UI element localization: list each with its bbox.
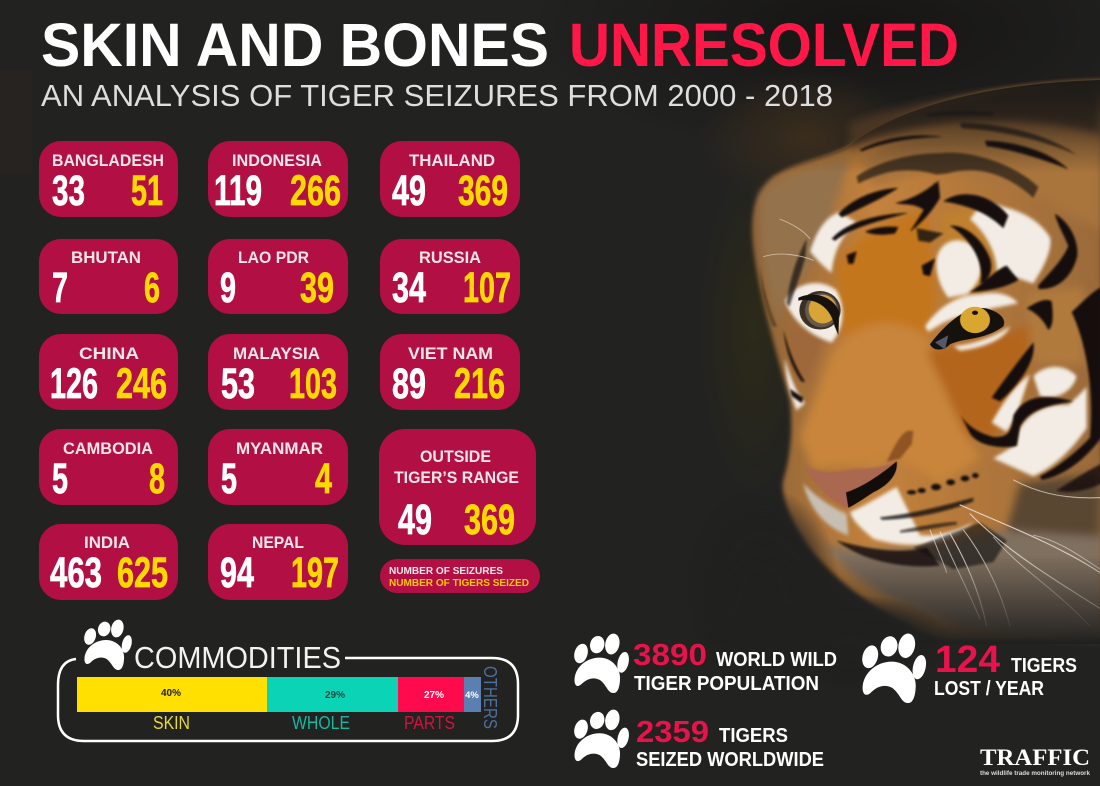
card: Indonesia: 266	[290, 167, 341, 215]
stat: world wild tiger population: 3890	[633, 637, 707, 672]
card: India	[39, 524, 178, 600]
stat: tigers lost per year: 124	[935, 639, 1000, 681]
stacked bar chart: 27%	[424, 690, 444, 701]
title: UNRESOLVED	[569, 11, 959, 79]
card: India: 625	[117, 549, 168, 597]
card: Indonesia: 119	[214, 167, 262, 215]
title: SKIN AND BONES	[41, 11, 549, 79]
card: Outside tiger's range: 369	[464, 496, 515, 544]
card: Viet Nam: VIET NAM	[408, 345, 493, 363]
subtitle: AN ANALYSIS OF TIGER SEIZURES FROM 2000 - 2018	[41, 78, 833, 113]
stacked bar chart	[77, 677, 481, 712]
card: India: 463	[50, 549, 102, 597]
card: Bhutan: 6	[144, 264, 160, 312]
card: Indonesia: INDONESIA	[232, 152, 322, 170]
card: Malaysia: 53	[221, 360, 255, 408]
stacked bar chart: 40%	[161, 688, 181, 699]
card: India: INDIA	[84, 534, 130, 552]
stat: world wild tiger population: TIGER POPULATION	[634, 673, 819, 695]
card: Thailand: THAILAND	[409, 152, 495, 170]
card: Lao PDR: 9	[220, 264, 236, 312]
card: Thailand: 49	[392, 167, 426, 215]
card: Bhutan: BHUTAN	[71, 249, 141, 267]
card: Bangladesh: 33	[52, 167, 85, 215]
heading: commodities: COMMODITIES	[134, 640, 341, 675]
card: Russia: RUSSIA	[419, 249, 481, 267]
legend: NUMBER OF TIGERS SEIZED	[389, 577, 529, 589]
card: Lao PDR: 39	[300, 264, 334, 312]
card: Viet Nam: 89	[392, 360, 426, 408]
card: China: 246	[116, 360, 167, 408]
stat: tigers lost per year: LOST / YEAR	[934, 678, 1044, 700]
card: China	[39, 334, 178, 410]
card: Myanmar	[208, 429, 348, 505]
card: Lao PDR: LAO PDR	[238, 249, 309, 267]
logo: TRAFFIC: TRAFFIC	[980, 745, 1090, 770]
card: Viet Nam	[380, 334, 520, 410]
card: Cambodia: 5	[52, 455, 68, 503]
stacked bar chart: 4%	[465, 690, 479, 701]
bar labels: WHOLE	[292, 713, 350, 733]
stat: tigers lost per year: TIGERS	[1011, 655, 1077, 677]
photo: tiger face	[732, 77, 1100, 645]
card: Cambodia: CAMBODIA	[63, 440, 153, 458]
stat: world wild tiger population	[572, 632, 837, 695]
bar labels: OTHERS	[480, 666, 500, 729]
card: Malaysia	[208, 334, 348, 410]
card: Russia	[380, 239, 520, 314]
panel: commodities	[58, 618, 518, 741]
card: Bangladesh: BANGLADESH	[52, 152, 164, 170]
card: Malaysia: MALAYSIA	[233, 345, 320, 363]
card: Thailand	[380, 141, 520, 217]
card: Outside tiger's range: TIGER’S RANGE	[394, 469, 519, 487]
tiger left eye	[798, 291, 841, 335]
card: Outside tiger's range	[379, 429, 536, 545]
card: Nepal	[208, 524, 348, 600]
card: Nepal: NEPAL	[252, 534, 304, 552]
stat: tigers seized worldwide: SEIZED WORLDWIDE	[636, 749, 824, 771]
card: Russia: 34	[392, 264, 426, 312]
card: Outside tiger's range: 49	[398, 496, 432, 544]
card: Outside tiger's range: OUTSIDE	[420, 448, 491, 466]
stat: tigers seized worldwide: TIGERS	[719, 725, 788, 747]
card: Cambodia	[39, 429, 178, 505]
title	[41, 11, 959, 79]
tiger nose	[805, 461, 897, 508]
bar labels: SKIN	[153, 713, 190, 733]
card: Russia: 107	[463, 264, 511, 312]
card: Lao PDR	[208, 239, 348, 314]
card: Bangladesh: 51	[131, 167, 163, 215]
logo: TRAFFIC: the wildlife trade monitoring network	[980, 770, 1090, 777]
card: Myanmar: MYANMAR	[236, 440, 323, 458]
card: Malaysia: 103	[289, 360, 337, 408]
tiger right eye	[930, 307, 1004, 350]
card: Cambodia: 8	[149, 455, 165, 503]
tiger whiskers	[763, 219, 1100, 626]
legend: NUMBER OF SEIZURES	[389, 565, 503, 577]
stat: world wild tiger population: WORLD WILD	[716, 649, 837, 671]
stacked bar chart: 29%	[325, 690, 345, 701]
card: Viet Nam: 216	[454, 360, 505, 408]
card: Bangladesh	[39, 141, 178, 217]
bar labels: PARTS	[404, 713, 455, 733]
card: China: CHINA	[79, 345, 139, 363]
card: Myanmar: 5	[221, 455, 237, 503]
stat: tigers seized worldwide	[572, 708, 824, 771]
card: Indonesia	[208, 141, 348, 217]
card: Nepal: 197	[291, 549, 339, 597]
card: Nepal: 94	[220, 549, 254, 597]
card: Myanmar: 4	[315, 455, 332, 503]
icon: commodities paw	[82, 618, 133, 670]
stat: tigers seized worldwide: 2359	[636, 714, 709, 749]
bar labels	[153, 666, 500, 733]
legend	[380, 559, 540, 593]
card: China: 126	[50, 360, 98, 408]
stat: tigers lost per year	[859, 631, 1077, 703]
card: Thailand: 369	[458, 167, 508, 215]
card: Bhutan	[39, 239, 178, 314]
card: Bhutan: 7	[52, 264, 68, 312]
